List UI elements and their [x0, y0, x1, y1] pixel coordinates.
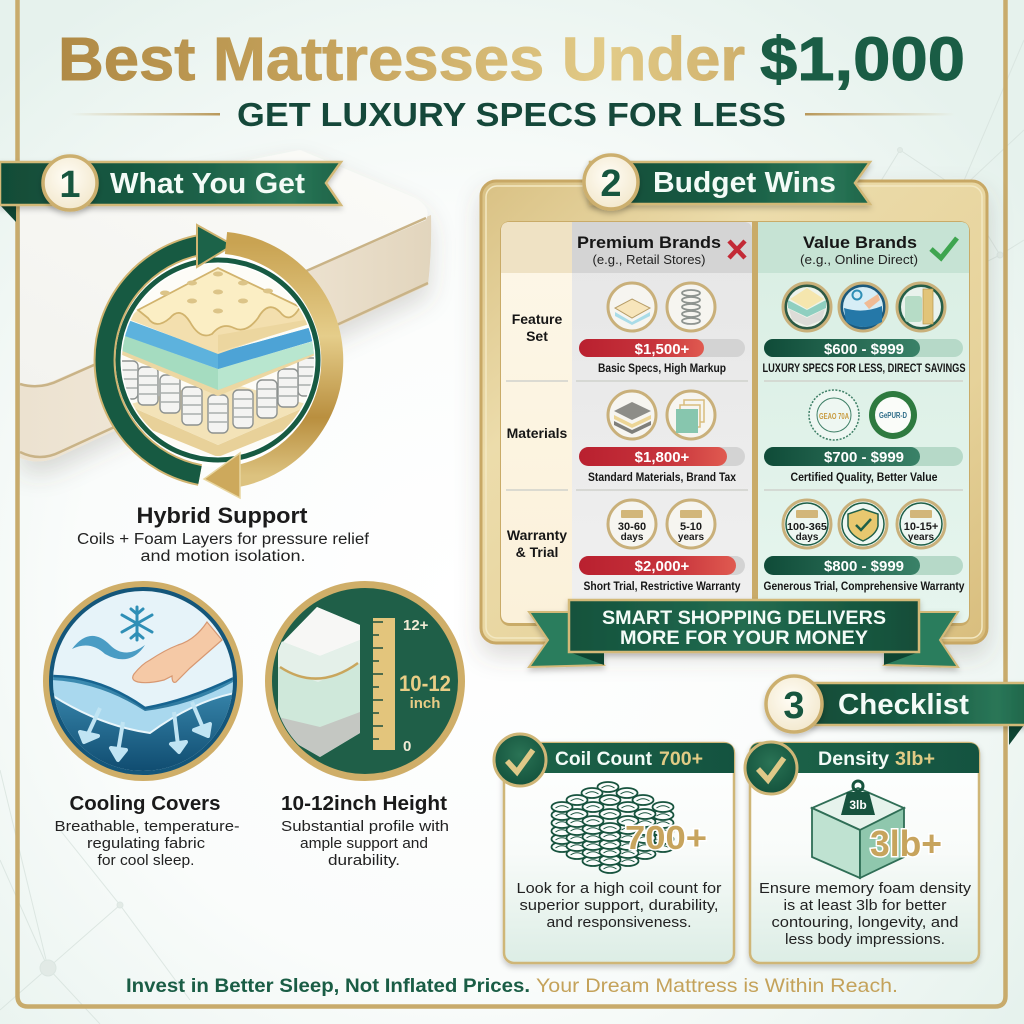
value row 3 icons: years — [908, 532, 935, 543]
height text: 10-12inch Height — [281, 793, 447, 815]
premium row 3 icons: 5-10 — [680, 521, 702, 533]
premium row 3 icons: 30-60 — [618, 521, 646, 533]
card: coil count — [494, 734, 734, 963]
cooling covers medallion — [43, 581, 243, 781]
column header: premium brands: Premium Brands — [577, 233, 721, 252]
column header: premium brands — [577, 233, 745, 267]
card: density: Ensure memory foam density — [759, 880, 972, 897]
row label column: Feature — [512, 311, 562, 327]
icon: hand — [133, 622, 222, 683]
hybrid support text: and motion isolation. — [140, 548, 306, 565]
premium row 2 price bar: Standard Materials, Brand Tax — [588, 470, 736, 484]
height text: Substantial profile with — [281, 819, 449, 835]
card: density: 3lb+ — [895, 749, 935, 770]
value row 1 icons — [783, 283, 945, 331]
badge 2 — [584, 155, 638, 209]
badge 3 — [766, 676, 822, 732]
mattress block — [278, 607, 360, 757]
row label column: Set — [526, 328, 548, 344]
value row 1 price bar: $600 - $999 — [824, 341, 904, 358]
footer tagline — [126, 975, 898, 997]
premium row 1 price bar: Basic Specs, High Markup — [598, 361, 726, 375]
value row 2 certification badges — [809, 390, 917, 440]
premium row 2 icons — [608, 391, 715, 439]
premium row 3 price bar: Short Trial, Restrictive Warranty — [584, 579, 741, 593]
height text: durability. — [328, 853, 400, 869]
cooling covers text — [54, 793, 240, 869]
icon: coil pile — [552, 782, 674, 873]
section 1 ribbon — [0, 156, 341, 222]
gold arrow arc — [204, 243, 332, 498]
row label column: Materials — [507, 425, 568, 441]
premium row 3 icons — [608, 500, 715, 548]
cooling covers text: regulating fabric — [87, 836, 205, 852]
icon: foam cube with weight: 3lb — [849, 798, 867, 812]
title: Best Mattresses Under — [58, 25, 745, 93]
premium row 3 icons: years — [678, 532, 705, 543]
value row 2 price bar — [764, 447, 963, 484]
row label column — [501, 222, 969, 625]
premium row 3 price bar — [579, 556, 745, 593]
icon: foam cube with weight — [812, 781, 904, 878]
premium row 3 price bar: $2,000+ — [635, 558, 690, 575]
smart shopping banner: SMART SHOPPING DELIVERS — [602, 607, 886, 629]
badge 3: 3 — [783, 685, 805, 727]
value row 3 price bar: Generous Trial, Comprehensive Warranty — [764, 579, 965, 593]
section 3 ribbon: Checklist — [838, 689, 969, 721]
section 3 ribbon — [766, 676, 1024, 745]
mattress illustration — [19, 210, 439, 480]
value row 2 certification badges: GePUR-D — [879, 411, 907, 420]
height medallion: 10-12 — [399, 671, 451, 696]
card: density: is at least 3lb for better — [784, 897, 946, 914]
row label column: & Trial — [516, 544, 558, 560]
green arrow arc — [105, 225, 233, 475]
icons: cooling arrows — [80, 702, 210, 760]
value row 3 price bar: $800 - $999 — [824, 558, 904, 575]
card: coil count: 700+ — [625, 819, 707, 856]
height text — [281, 793, 449, 869]
section 1 ribbon: What You Get — [110, 168, 305, 200]
height text: ample support and — [300, 836, 428, 852]
value row 3 icons: 100-365 — [787, 522, 827, 533]
footer tagline: Invest in Better Sleep, Not Inflated Prices. — [126, 975, 530, 997]
hybrid support text: Hybrid Support — [136, 503, 308, 528]
column header: value brands: Value Brands — [803, 233, 917, 252]
card: coil count: 700+ — [659, 749, 703, 770]
column header: premium brands: (e.g., Retail Stores) — [592, 252, 706, 267]
hybrid support text: Coils + Foam Layers for pressure relief — [77, 531, 370, 548]
card: density: 3lb+ — [870, 823, 942, 864]
check badge — [745, 742, 797, 794]
section 2 ribbon — [584, 155, 870, 209]
premium row 1 icons — [608, 283, 715, 331]
premium row 2 price bar: $1,800+ — [635, 449, 690, 466]
card: coil count: Look for a high coil count for — [516, 880, 722, 897]
card: density: less body impressions. — [785, 931, 945, 948]
card: density: Density — [818, 749, 889, 770]
premium row 2 price bar — [579, 447, 745, 484]
value row 3 price bar — [764, 556, 965, 593]
badge 1 — [43, 156, 97, 210]
value row 3 icons — [783, 500, 945, 548]
card: density — [745, 742, 979, 963]
section 2 ribbon: Budget Wins — [653, 167, 836, 199]
card: coil count: and responsiveness. — [546, 914, 692, 931]
icon: wind — [72, 636, 145, 659]
card: coil count: Coil Count — [555, 749, 653, 770]
column header: value brands — [800, 233, 957, 267]
panel: budget wins — [481, 181, 987, 643]
value row 2 certification badges: GEAO 70A — [819, 412, 849, 421]
hybrid support medallion — [105, 225, 332, 498]
title: $1,000 — [760, 25, 965, 93]
value row 2 price bar: Certified Quality, Better Value — [790, 470, 938, 484]
card: coil count: superior support, durability, — [520, 897, 718, 914]
check badge — [494, 734, 546, 786]
height medallion — [265, 581, 465, 781]
badge 1: 1 — [59, 164, 81, 206]
hybrid support text — [77, 503, 370, 565]
value row 3 icons: days — [796, 532, 819, 543]
mattress cross-section layers — [118, 262, 320, 458]
row label column: Warranty — [507, 527, 567, 543]
premium row 1 price bar: $1,500+ — [635, 341, 690, 358]
height medallion: inch — [410, 695, 440, 712]
value row 3 icons: 10-15+ — [904, 521, 938, 533]
cooling covers text: Cooling Covers — [70, 793, 220, 815]
cooling covers text: Breathable, temperature- — [54, 819, 240, 835]
column header: value brands: (e.g., Online Direct) — [800, 252, 918, 267]
premium row 3 icons: days — [621, 532, 644, 543]
footer tagline: Your Dream Mattress is Within Reach. — [536, 975, 898, 997]
badge 2: 2 — [600, 163, 622, 205]
smart shopping banner: MORE FOR YOUR MONEY — [620, 627, 868, 649]
subtitle: GET LUXURY SPECS FOR LESS — [237, 97, 786, 134]
card: density: contouring, longevity, and — [772, 914, 958, 931]
smart shopping banner — [529, 600, 958, 667]
height medallion: 12+ — [403, 617, 429, 634]
premium row 1 price bar — [579, 339, 745, 375]
ruler — [373, 618, 395, 750]
icon: snowflake — [122, 607, 152, 640]
value row 1 price bar: LUXURY SPECS FOR LESS, DIRECT SAVINGS — [762, 361, 966, 375]
height medallion: 0 — [403, 738, 411, 755]
value row 1 price bar — [762, 339, 966, 375]
value row 2 price bar: $700 - $999 — [824, 449, 904, 466]
cooling covers text: for cool sleep. — [98, 853, 194, 869]
